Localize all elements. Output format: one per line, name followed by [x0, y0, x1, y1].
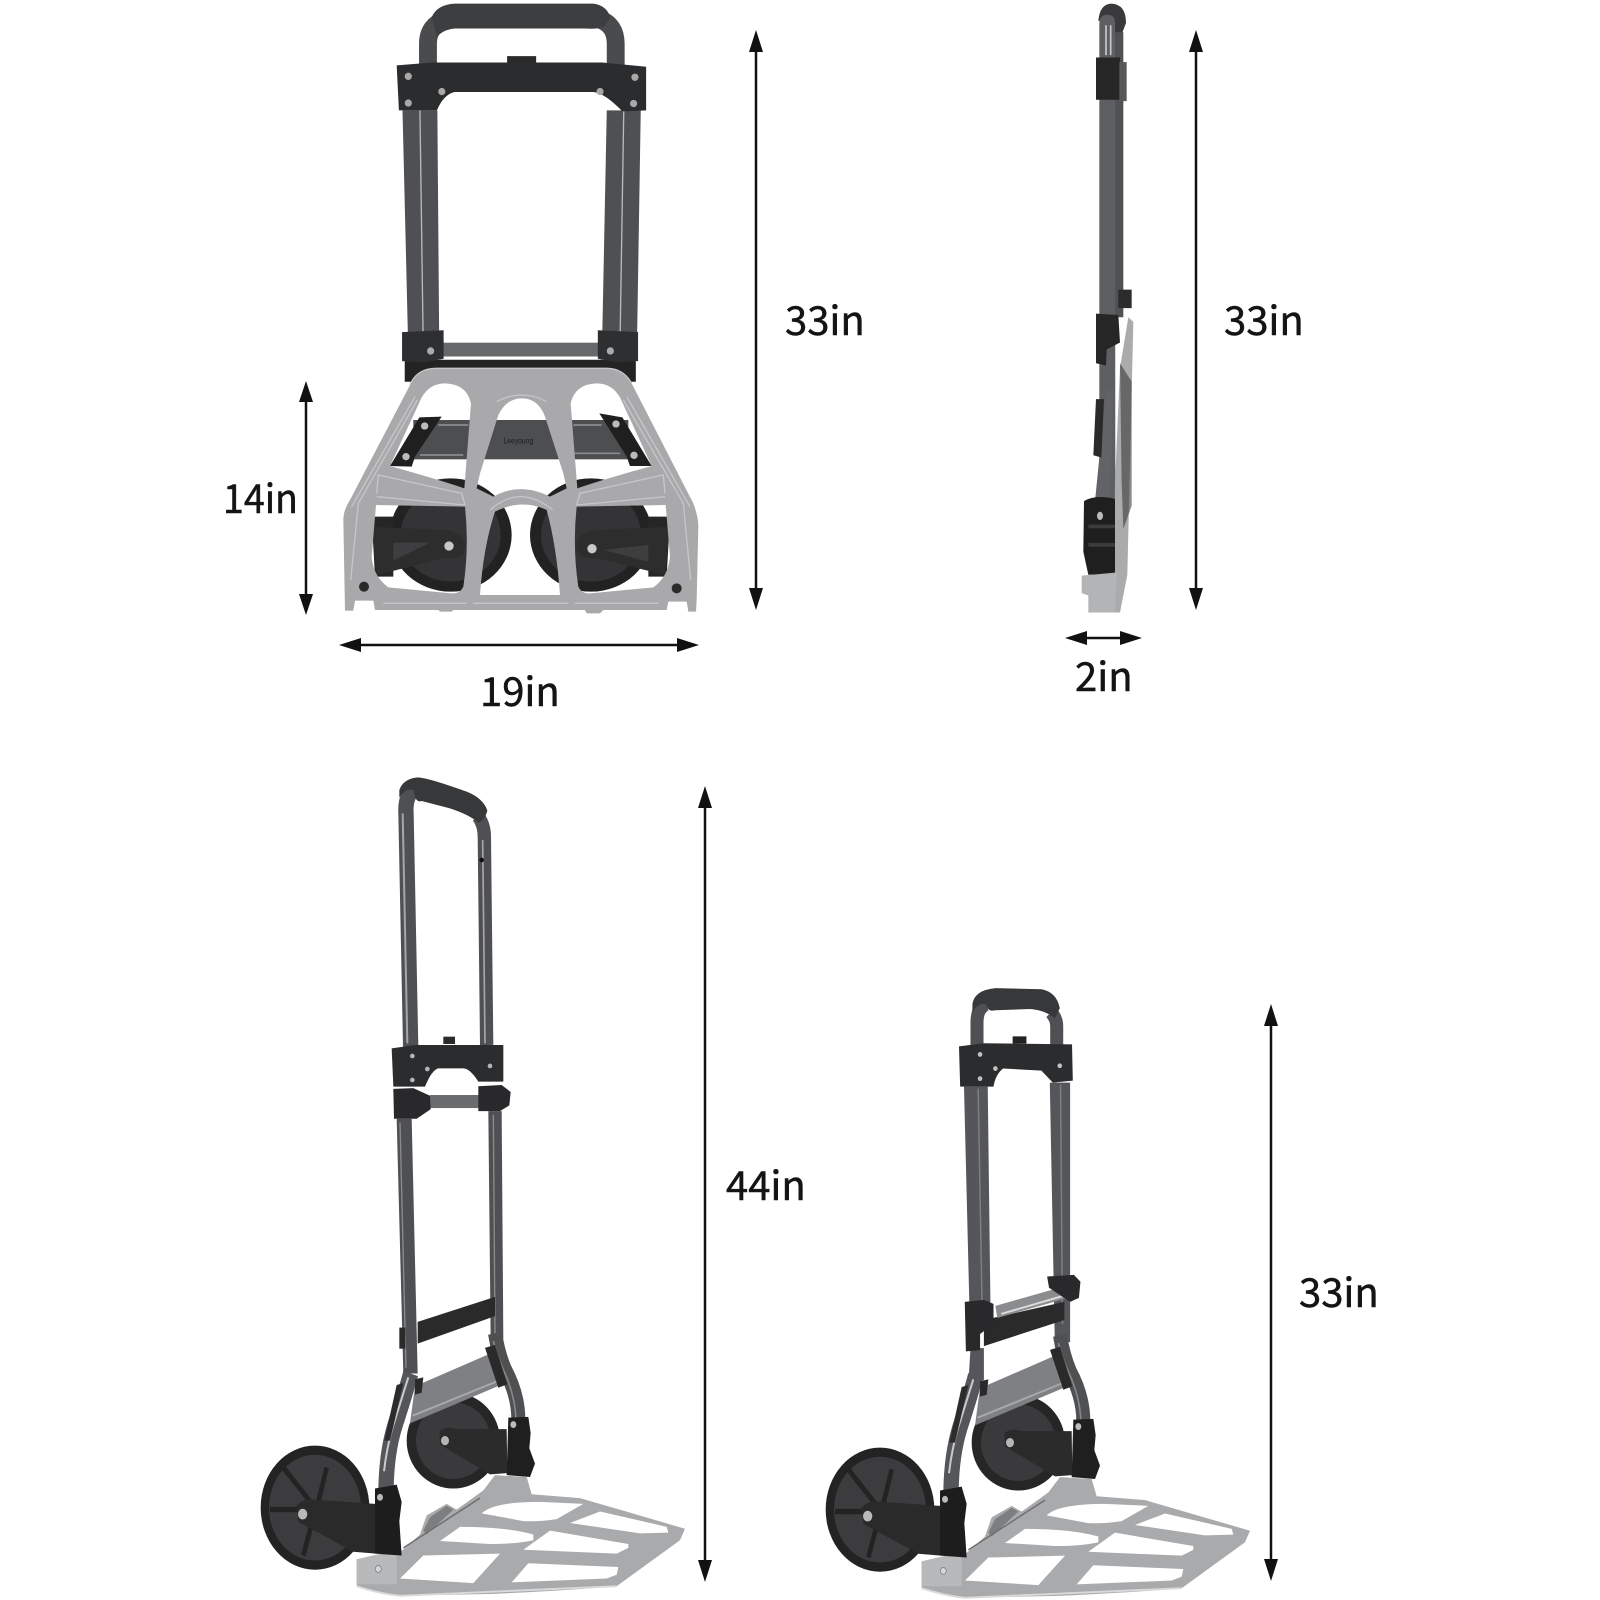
- label: 44in: 44in: [726, 1154, 806, 1212]
- height arrow: 33in compact view: [1264, 1004, 1278, 1581]
- brand label: Leeyoung: [503, 435, 534, 445]
- width arrow: 19in: [339, 638, 699, 652]
- height arrow: 44in: [698, 786, 712, 1582]
- height arrow: 33in front view: [749, 30, 763, 610]
- frame lower section: [261, 1085, 685, 1596]
- label: 14in: 14in: [223, 467, 298, 525]
- extended handle: [392, 777, 503, 1087]
- label: 33in compact view: 33in: [1299, 1261, 1379, 1319]
- label: 33in front view: 33in: [785, 289, 865, 347]
- height arrow: 33in side view: [1189, 30, 1203, 610]
- trolley: compact upright view: [826, 988, 1250, 1598]
- base plate with wheels: [343, 368, 698, 613]
- trolley: extended handle view: [261, 777, 685, 1596]
- trolley: folded side view: [1082, 4, 1133, 612]
- label: 33in side view: 33in: [1224, 289, 1304, 347]
- compact lower section: [826, 1335, 1250, 1598]
- label: 2in: 2in: [1075, 645, 1133, 703]
- label: 19in: 19in: [480, 660, 560, 718]
- compact handle and frame: [959, 988, 1080, 1380]
- frame: handle, brackets and tubes: [397, 4, 646, 382]
- width arrow: 2in: [1065, 631, 1142, 645]
- trolley: folded front view: [343, 4, 698, 613]
- height arrow: 14in: [299, 381, 313, 615]
